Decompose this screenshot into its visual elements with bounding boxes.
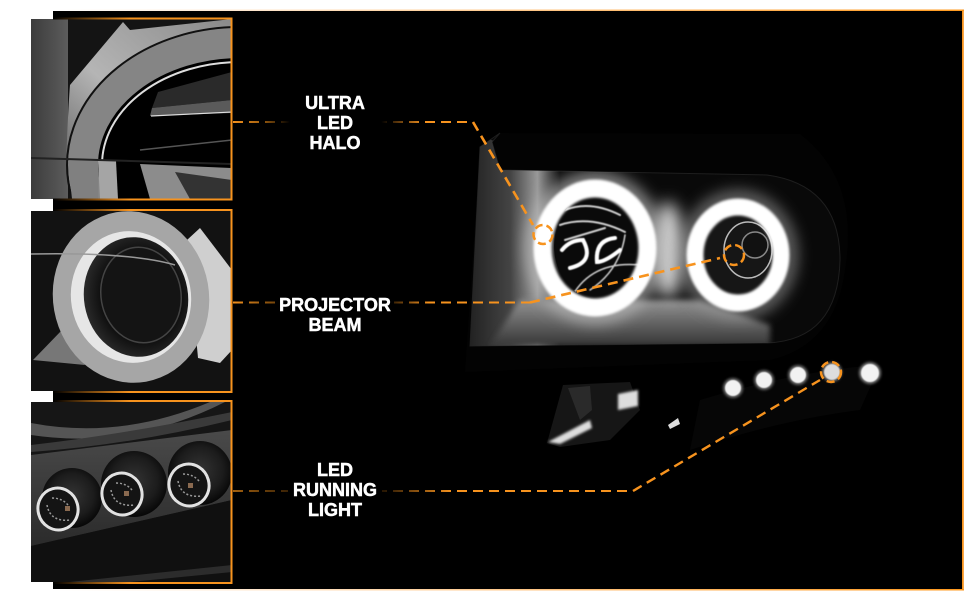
right ring glow — [686, 198, 790, 312]
panel border — [53, 210, 232, 392]
lens surround — [470, 133, 840, 346]
label: ultra LED halo: LED — [317, 113, 353, 133]
right projector ring — [695, 207, 781, 303]
label: projector beam: PROJECTOR — [279, 295, 391, 315]
inner chrome line — [101, 61, 230, 160]
leader line: projector beam — [233, 245, 744, 302]
halo ring — [52, 211, 210, 383]
label: ultra LED halo — [305, 93, 365, 153]
lower dark — [32, 500, 230, 546]
seam line — [31, 158, 232, 164]
left ring glow — [533, 180, 657, 316]
housing band — [31, 430, 232, 546]
left grey strip — [31, 19, 68, 200]
side chrome — [187, 228, 232, 363]
white inner ring — [70, 231, 192, 363]
left ultra LED ring — [542, 188, 648, 308]
upper band — [31, 402, 225, 439]
ring outer dark edge — [66, 26, 230, 192]
label: projector beam — [276, 295, 394, 335]
projector lens — [100, 246, 182, 344]
headlight photo — [465, 130, 881, 450]
reflection stripes — [152, 72, 232, 108]
LED lights — [723, 362, 881, 398]
panel border — [53, 401, 232, 583]
reflection streaks — [560, 206, 625, 240]
panel border — [53, 18, 232, 200]
panel: ultra LED halo closeup — [31, 18, 232, 200]
right lens interior — [702, 215, 774, 295]
chrome surround — [66, 19, 232, 165]
leader line: ultra LED halo — [233, 122, 552, 244]
left lens interior — [554, 204, 638, 300]
leader line: LED running light — [233, 362, 841, 491]
LED lenses — [36, 462, 211, 532]
label: ultra LED halo: ULTRA — [305, 93, 365, 113]
lower left wedge — [33, 330, 85, 365]
LED chips — [65, 483, 193, 511]
seam line — [31, 254, 175, 265]
lens — [84, 237, 188, 357]
label: projector beam: BEAM — [308, 315, 362, 335]
housing — [465, 133, 848, 372]
label: LED running light — [288, 460, 382, 520]
panel: LED running light closeup — [31, 401, 232, 583]
halo ring — [68, 28, 230, 198]
panel: projector beam closeup — [31, 199, 232, 395]
left wedge of lens — [470, 140, 558, 346]
glow between rings — [652, 202, 684, 298]
LED housings — [42, 468, 102, 528]
label: LED running light: LED — [317, 460, 353, 480]
label: LED running light: RUNNING — [293, 480, 377, 500]
lower reflection — [490, 300, 770, 346]
lens glow group — [465, 130, 790, 346]
LED speckles — [47, 474, 201, 520]
lower bezel — [690, 365, 880, 450]
label: LED running light: LIGHT — [308, 500, 362, 520]
label: ultra LED halo: HALO — [310, 133, 360, 153]
fog lamp section — [547, 382, 680, 447]
